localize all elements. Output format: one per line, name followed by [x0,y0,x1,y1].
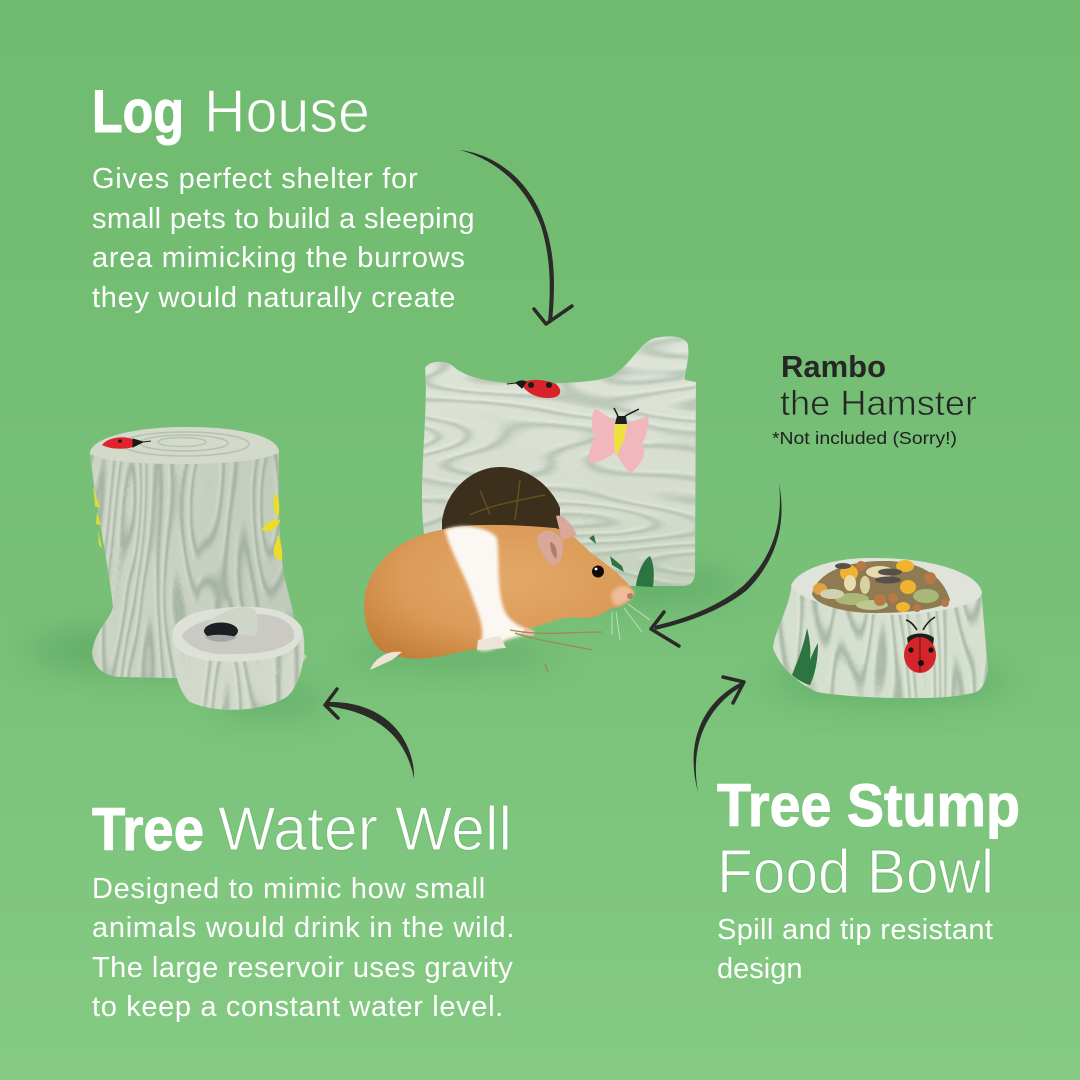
text block: log house description: small pets to build a sleeping [92,203,475,235]
text block: water well description: animals would drink in the wild. [92,912,515,944]
panel: tree stump food bowl text [717,772,1020,985]
text block: food bowl description: Spill and tip resistant [717,914,993,946]
text block: log house description: Gives perfect shelter for [92,163,418,195]
hamster feet and tail [370,636,506,670]
panel: log house text [92,78,475,314]
bowl rim [172,607,302,662]
heading: Food Bowl: Food Bowl [717,838,994,907]
heading: Tree Water Well: Water Well [218,795,512,864]
grass on bowl [792,628,818,685]
bowl inner [791,558,982,615]
log hole [442,467,560,540]
label: the Hamster: the Hamster [780,384,977,423]
water bowl [172,607,304,710]
note: not included: *Not included (Sorry!) [772,428,957,448]
hamster muzzle [611,586,634,606]
illustration: hamster [364,516,650,672]
icon: butterfly [589,408,648,473]
text block: water well description: The large reservoir uses gravity [92,952,513,984]
text block: water well description: to keep a constant water level. [92,991,504,1023]
hamster white patch [445,526,535,651]
food [812,560,950,613]
bowl basin [182,614,294,654]
arrow: to food bowl [694,677,744,792]
shadows [25,567,1010,714]
arrow: to hamster [651,483,782,646]
illustration: food bowl [773,558,988,698]
grass [589,535,654,587]
icon: flower right [262,494,282,560]
panel: tree water well text [92,795,515,1023]
hay and whiskers [510,604,650,672]
text block: water well description: Designed to mimic how small [92,873,486,905]
illustration: log house [422,336,696,587]
heading: Log House [92,78,370,145]
icon: ladybird on bowl [904,617,936,673]
icon: ladybird on well [102,437,151,449]
well trunk [90,427,307,678]
heading: Tree Water Well [92,795,512,864]
well top [90,427,279,464]
panel: hamster note [772,349,977,448]
hamster ears [537,516,577,566]
heading: Log House: House [204,78,370,145]
text block: log house description: area mimicking the burrows [92,242,466,274]
arrow: to log house [460,150,572,324]
icon: ladybird on log [507,380,560,398]
text block: log house description: they would naturally create [92,282,456,314]
hamster body [364,525,634,659]
well spout [204,607,258,636]
bowl body [773,559,988,698]
text block: food bowl description: design [717,953,802,985]
heading: Tree Water Well: Tree [92,796,204,863]
log body [422,336,696,586]
icon: flower left [93,486,102,548]
arrow: to water well [325,689,414,779]
label: Rambo: Rambo [781,349,886,384]
illustration: tree water well [90,427,307,710]
heading: Log House: Log [92,78,184,145]
heading: Tree Stump: Tree Stump [717,772,1020,839]
